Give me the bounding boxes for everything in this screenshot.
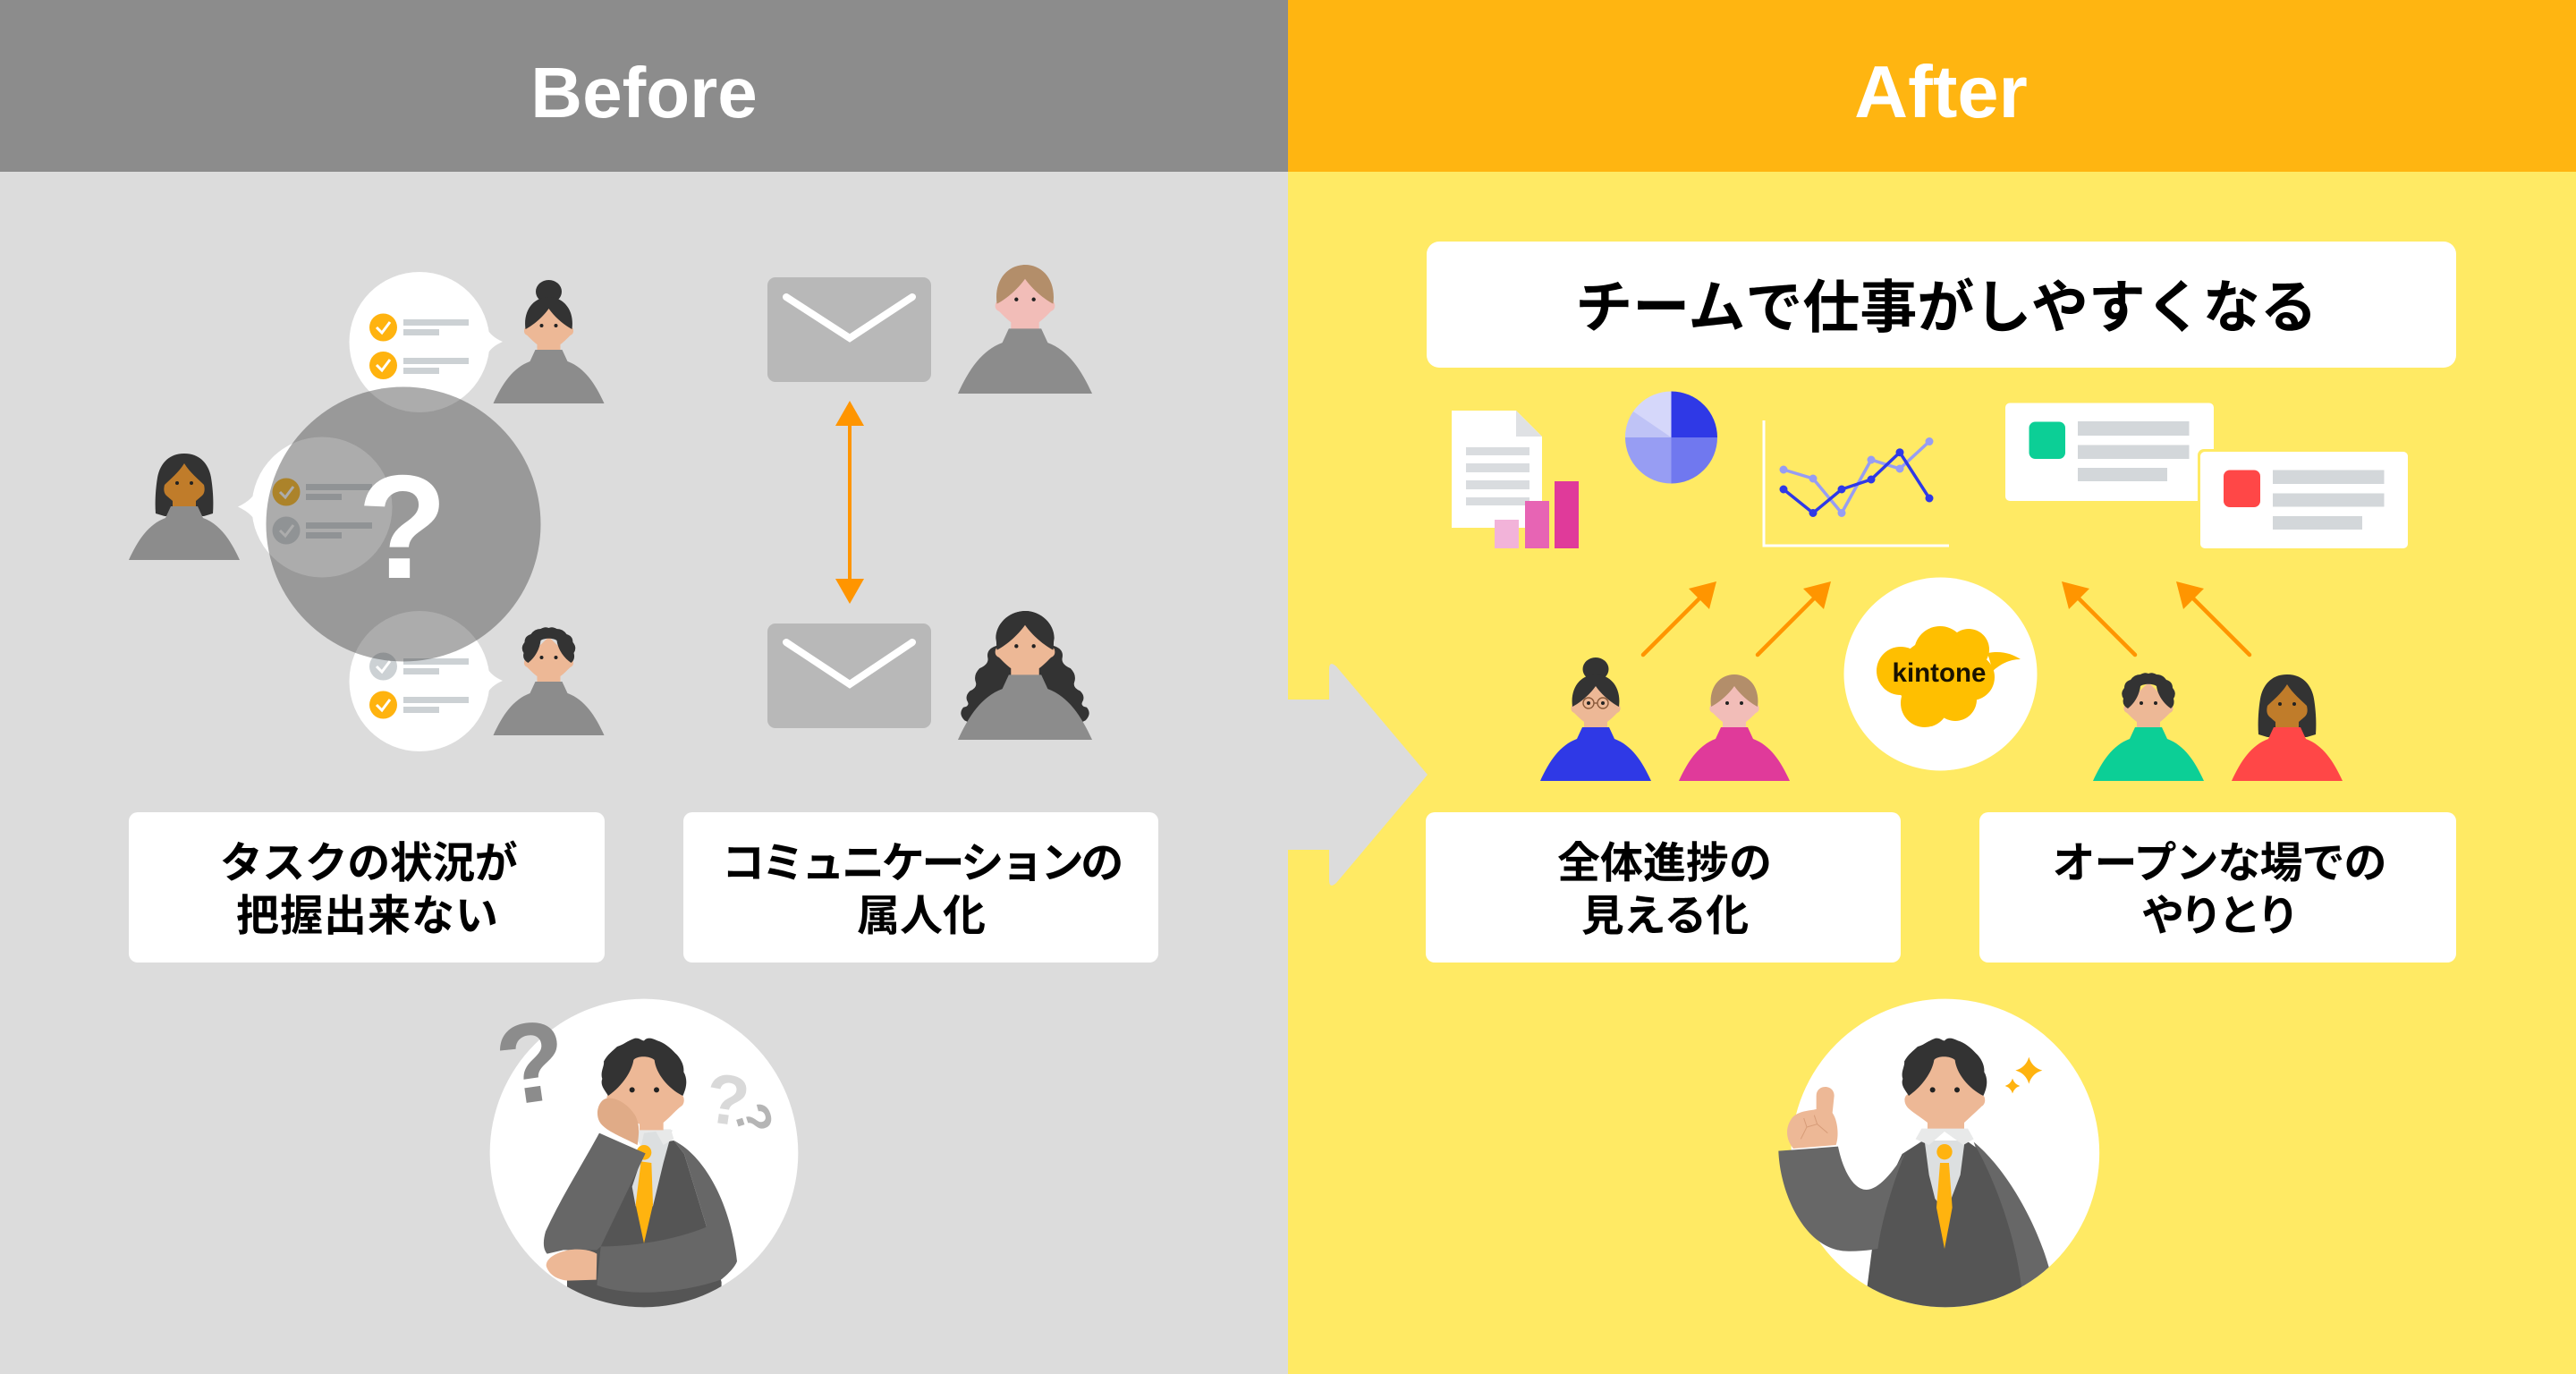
icon: pie chart bbox=[1625, 392, 1717, 483]
question marks bbox=[488, 995, 784, 1142]
label: open exchange: オープンな場での bbox=[2052, 840, 2386, 887]
label: overall progress bbox=[1426, 812, 1901, 963]
header: after: After bbox=[1854, 50, 2028, 133]
label: communication: コミュニケーションの bbox=[722, 840, 1121, 887]
icon: mail top bbox=[767, 277, 931, 382]
sparkles bbox=[2005, 1057, 2042, 1093]
man figure bbox=[544, 1039, 737, 1312]
person: brown hair, pink bbox=[1679, 674, 1790, 781]
question marks: ? bbox=[723, 1096, 784, 1141]
card: green bbox=[2005, 403, 2214, 501]
person: long wavy hair, grey bbox=[958, 611, 1092, 740]
person: brown hair, grey bbox=[958, 265, 1092, 394]
label: overall progress: 全体進捗の bbox=[1557, 840, 1772, 887]
person: long dark hair, grey bbox=[129, 454, 240, 560]
logo: kintone: kintone bbox=[1893, 658, 1986, 688]
arrow: up right 2 bbox=[1758, 581, 1831, 655]
arrow: up left 1 bbox=[2062, 581, 2135, 655]
person: curly hair, green bbox=[2093, 673, 2204, 781]
question marks: ? bbox=[488, 995, 574, 1130]
man figure bbox=[1778, 1039, 2049, 1312]
header: before: Before bbox=[530, 53, 758, 132]
arrow: two-way orange bbox=[835, 401, 864, 604]
person: bun with glasses, blue bbox=[1540, 657, 1651, 781]
label: overall progress: 見える化 bbox=[1581, 893, 1748, 940]
card: red bbox=[2198, 449, 2411, 551]
icon: mail bottom bbox=[767, 623, 931, 728]
arrow: big transition bbox=[1288, 664, 1428, 886]
label: communication bbox=[683, 812, 1158, 963]
header: after bbox=[1288, 0, 2576, 172]
speech bubble: bottom tasks bbox=[349, 611, 503, 751]
arrow: up left 2 bbox=[2176, 581, 2250, 655]
overlay: question circle bbox=[267, 386, 540, 662]
line chart bbox=[1764, 420, 1949, 546]
overlay: question circle: ? bbox=[358, 445, 447, 609]
speech bubble: top tasks bbox=[349, 272, 503, 412]
logo: kintone bbox=[1844, 578, 2038, 771]
header: before bbox=[0, 0, 1288, 172]
illustration: puzzled man bbox=[488, 995, 798, 1312]
question marks: ? bbox=[700, 1058, 754, 1142]
label: open exchange bbox=[1979, 812, 2456, 963]
panel: before bbox=[0, 0, 1288, 1374]
label: communication: 属人化 bbox=[857, 893, 986, 940]
icon: document with bars bbox=[1452, 411, 1579, 548]
label: task status: タスクの状況が bbox=[220, 840, 518, 887]
person: long dark hair, red bbox=[2232, 674, 2343, 781]
arrow: up right 1 bbox=[1643, 581, 1716, 655]
panel: after bbox=[1288, 0, 2576, 1374]
illustration: satisfied man bbox=[1778, 999, 2099, 1312]
person: curly hair, grey bbox=[494, 627, 605, 735]
label: task status bbox=[129, 812, 605, 963]
title box bbox=[1427, 242, 2456, 368]
title box: チームで仕事がしやすくなる bbox=[1575, 276, 2318, 340]
label: open exchange: やりとり bbox=[2141, 893, 2295, 940]
person: bun hair, grey bbox=[494, 280, 605, 403]
label: task status: 把握出来ない bbox=[236, 893, 499, 940]
speech bubble: left tasks bbox=[238, 437, 392, 578]
